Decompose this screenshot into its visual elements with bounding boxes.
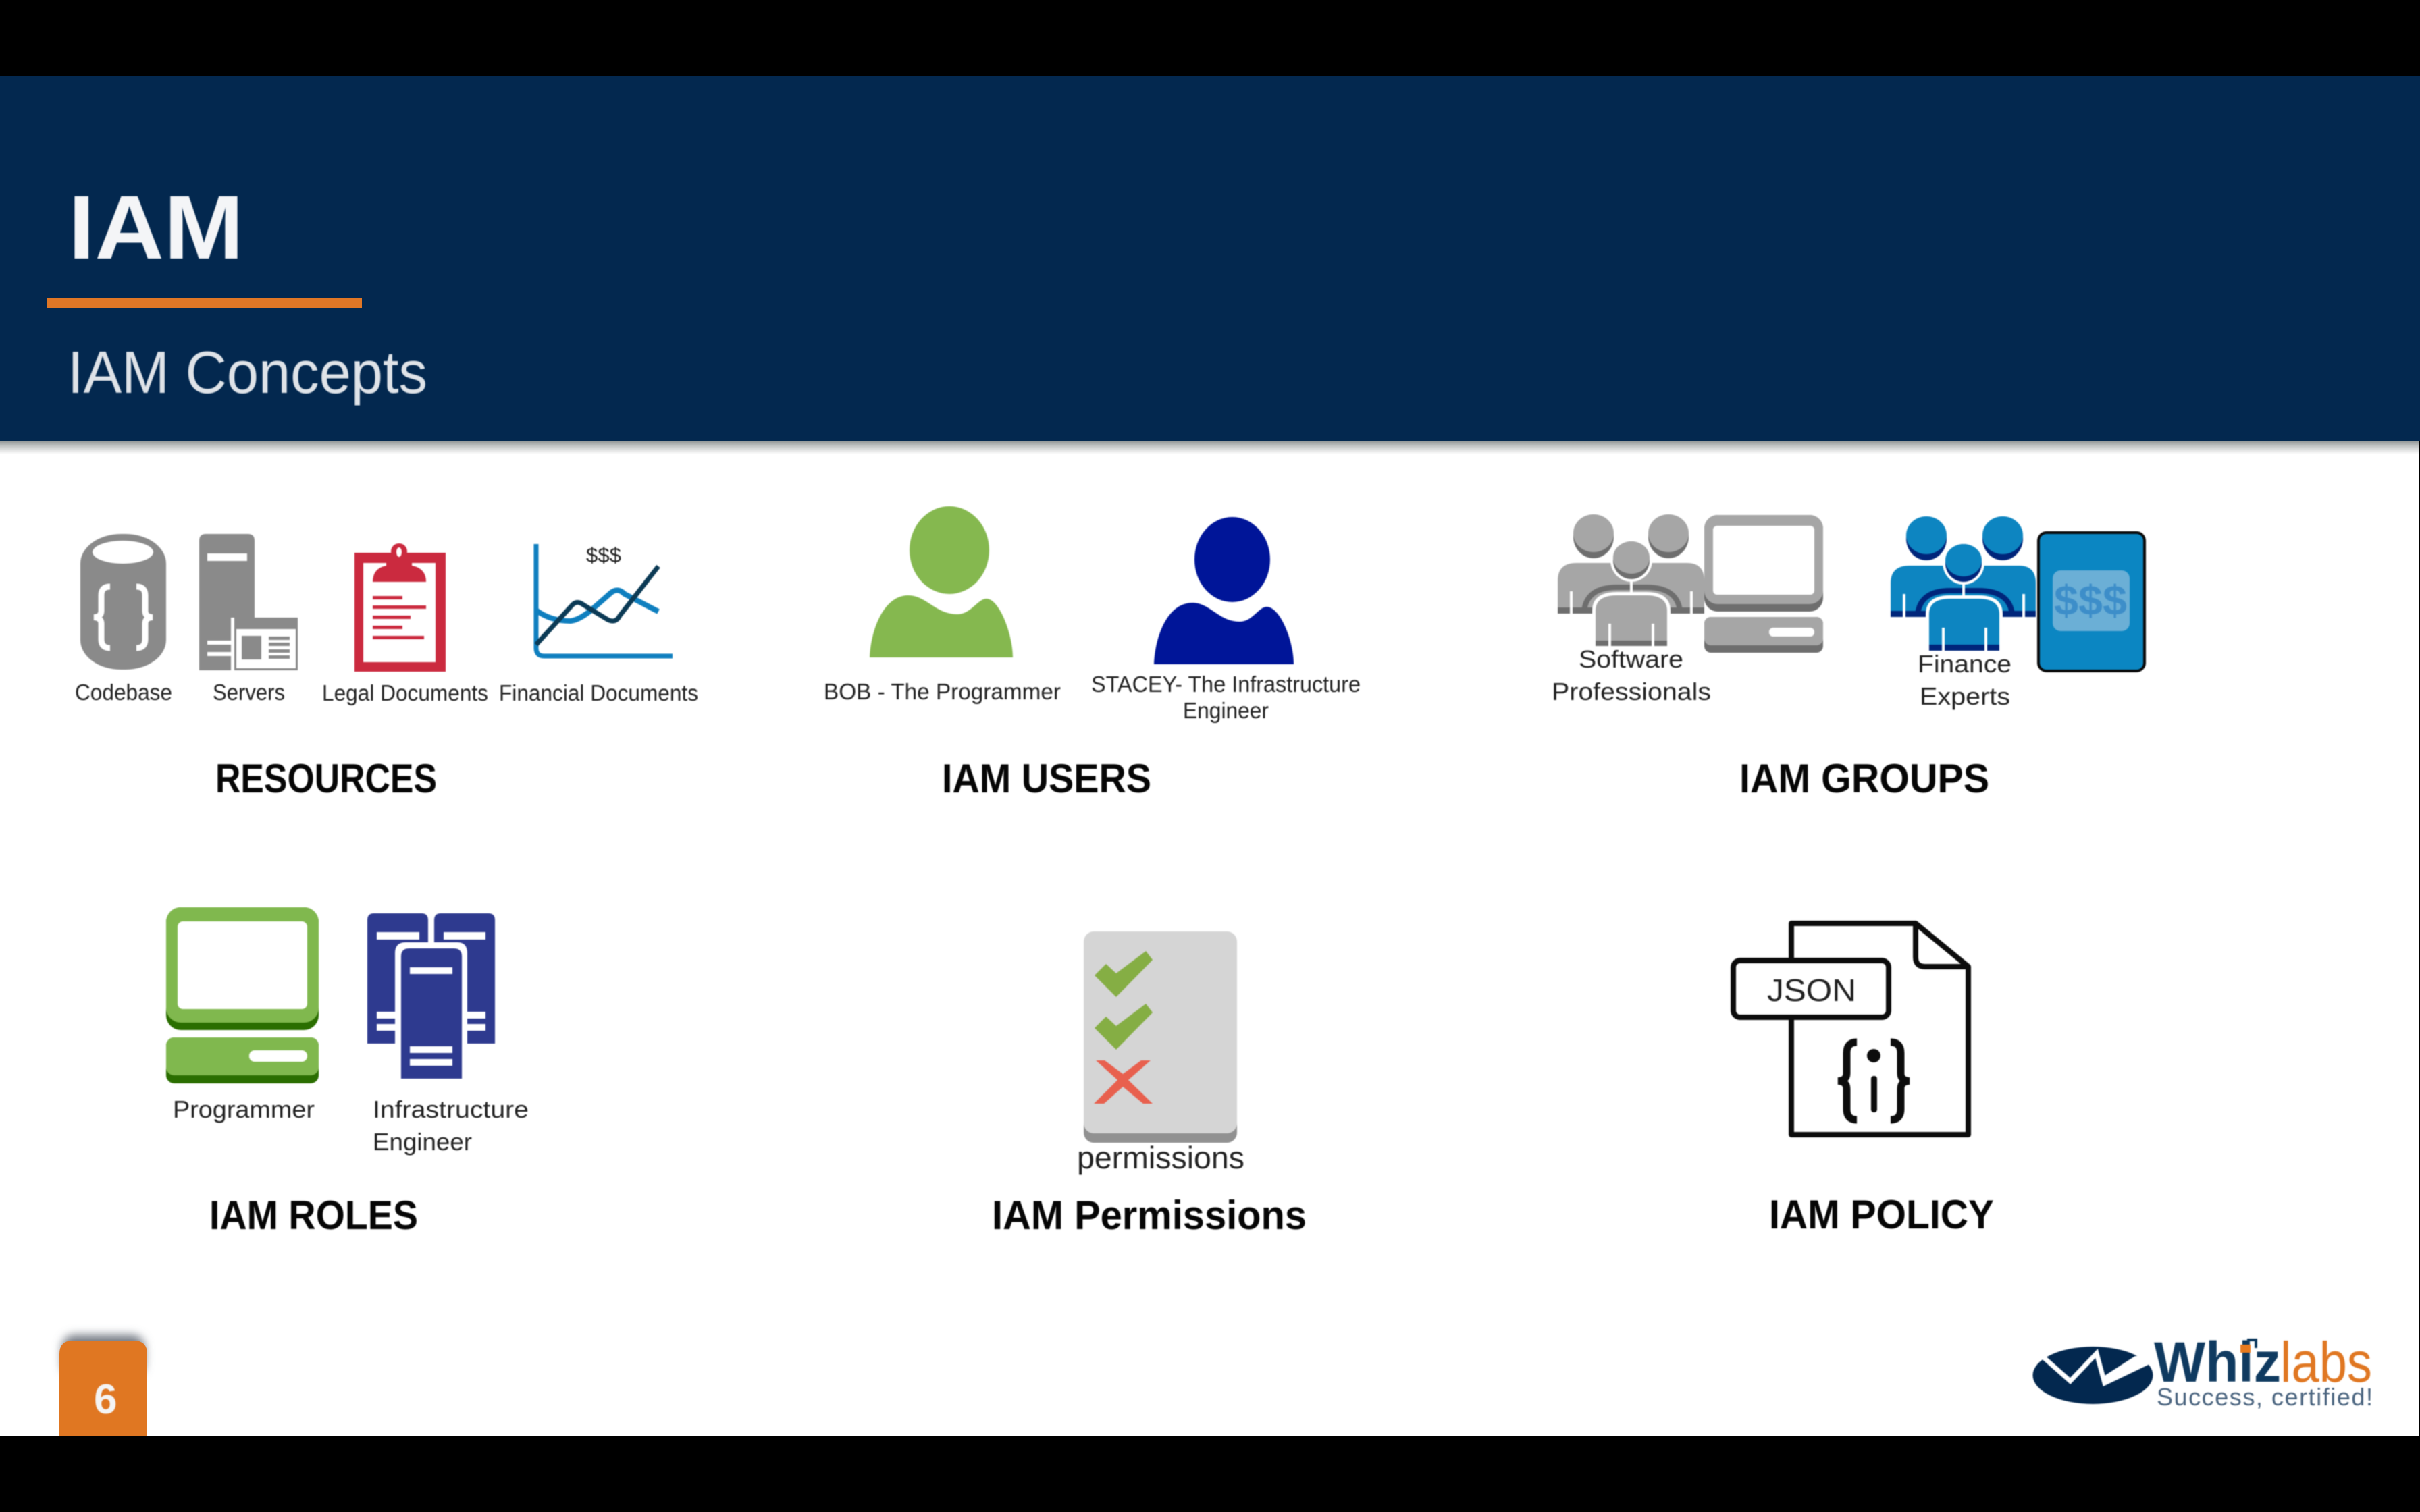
label: software professionals: Software <box>1579 645 1683 673</box>
icon: financial chart: $$$ <box>586 543 621 567</box>
wordmark labs: labs <box>2280 1330 2372 1394</box>
label: programmer: Programmer <box>173 1096 315 1123</box>
panel: iam groups <box>1552 514 2145 801</box>
panel: iam roles <box>166 907 529 1238</box>
label: servers: Servers <box>213 680 285 705</box>
label: infrastructure engineer <box>373 1096 529 1156</box>
subtitle: IAM Concepts <box>68 339 427 406</box>
label: infrastructure engineer: Engineer <box>373 1128 472 1156</box>
icon: financial chart <box>536 543 673 656</box>
label: legal documents: Legal Documents <box>322 680 488 705</box>
label: financial documents: Financial Documents <box>499 680 698 705</box>
icon: finance experts <box>1891 516 2145 671</box>
icon: legal clipboard <box>354 543 446 672</box>
heading: iam roles: IAM ROLES <box>209 1193 418 1238</box>
icon: stacey user <box>1154 517 1294 664</box>
label: stacey: Engineer <box>1183 698 1269 723</box>
label: infrastructure engineer: Infrastructure <box>373 1096 529 1123</box>
heading: iam policy: IAM POLICY <box>1769 1192 1994 1237</box>
icon: permissions sheet <box>1084 932 1237 1143</box>
icon: codebase cylinder <box>80 534 166 670</box>
page number badge <box>59 1335 147 1436</box>
heading: iam groups: IAM GROUPS <box>1739 756 1989 801</box>
panel: iam permissions <box>992 932 1307 1238</box>
orange divider <box>47 298 362 308</box>
icon: bob user <box>870 506 1013 657</box>
icon: finance experts: $$$ <box>2054 578 2127 624</box>
label: finance experts: Experts <box>1920 682 2010 710</box>
icon: software professionals <box>1558 514 1823 653</box>
icon: cross <box>1094 1060 1153 1104</box>
page number badge: 6 <box>94 1376 117 1423</box>
panel: iam policy <box>1733 923 1994 1237</box>
title: IAM <box>68 178 244 278</box>
icon: check two <box>1095 1004 1153 1050</box>
icon: logo ellipse <box>2032 1347 2155 1404</box>
label: finance experts <box>1918 650 2011 710</box>
header band <box>0 76 2420 454</box>
panel: resources <box>75 534 698 801</box>
heading: resources: RESOURCES <box>215 756 437 801</box>
icon: check one <box>1095 951 1153 997</box>
heading: iam users: IAM USERS <box>942 756 1151 801</box>
label: bob: BOB - The Programmer <box>824 679 1061 704</box>
label: stacey <box>1091 672 1361 723</box>
label: software professionals: Professionals <box>1552 678 1711 705</box>
label: finance experts: Finance <box>1918 650 2011 678</box>
label: stacey: STACEY- The Infrastructure <box>1091 672 1361 697</box>
wordmark: Whiz <box>2154 1330 2281 1394</box>
tagline: Success, certified! <box>2157 1383 2373 1411</box>
heading: iam permissions: IAM Permissions <box>992 1193 1307 1238</box>
wordmark accent <box>2240 1340 2256 1353</box>
label: codebase: Codebase <box>75 680 172 705</box>
logo: whizlabs <box>2032 1330 2373 1411</box>
icon: json document: JSON <box>1767 973 1856 1008</box>
icon: programmer computer <box>166 907 319 1083</box>
label: software professionals <box>1552 645 1711 705</box>
icon: json document <box>1733 923 1968 1135</box>
panel: iam users <box>824 506 1361 801</box>
icon: infrastructure servers <box>367 913 495 1080</box>
icon: servers <box>199 534 298 670</box>
label: permissions: permissions <box>1077 1140 1244 1175</box>
